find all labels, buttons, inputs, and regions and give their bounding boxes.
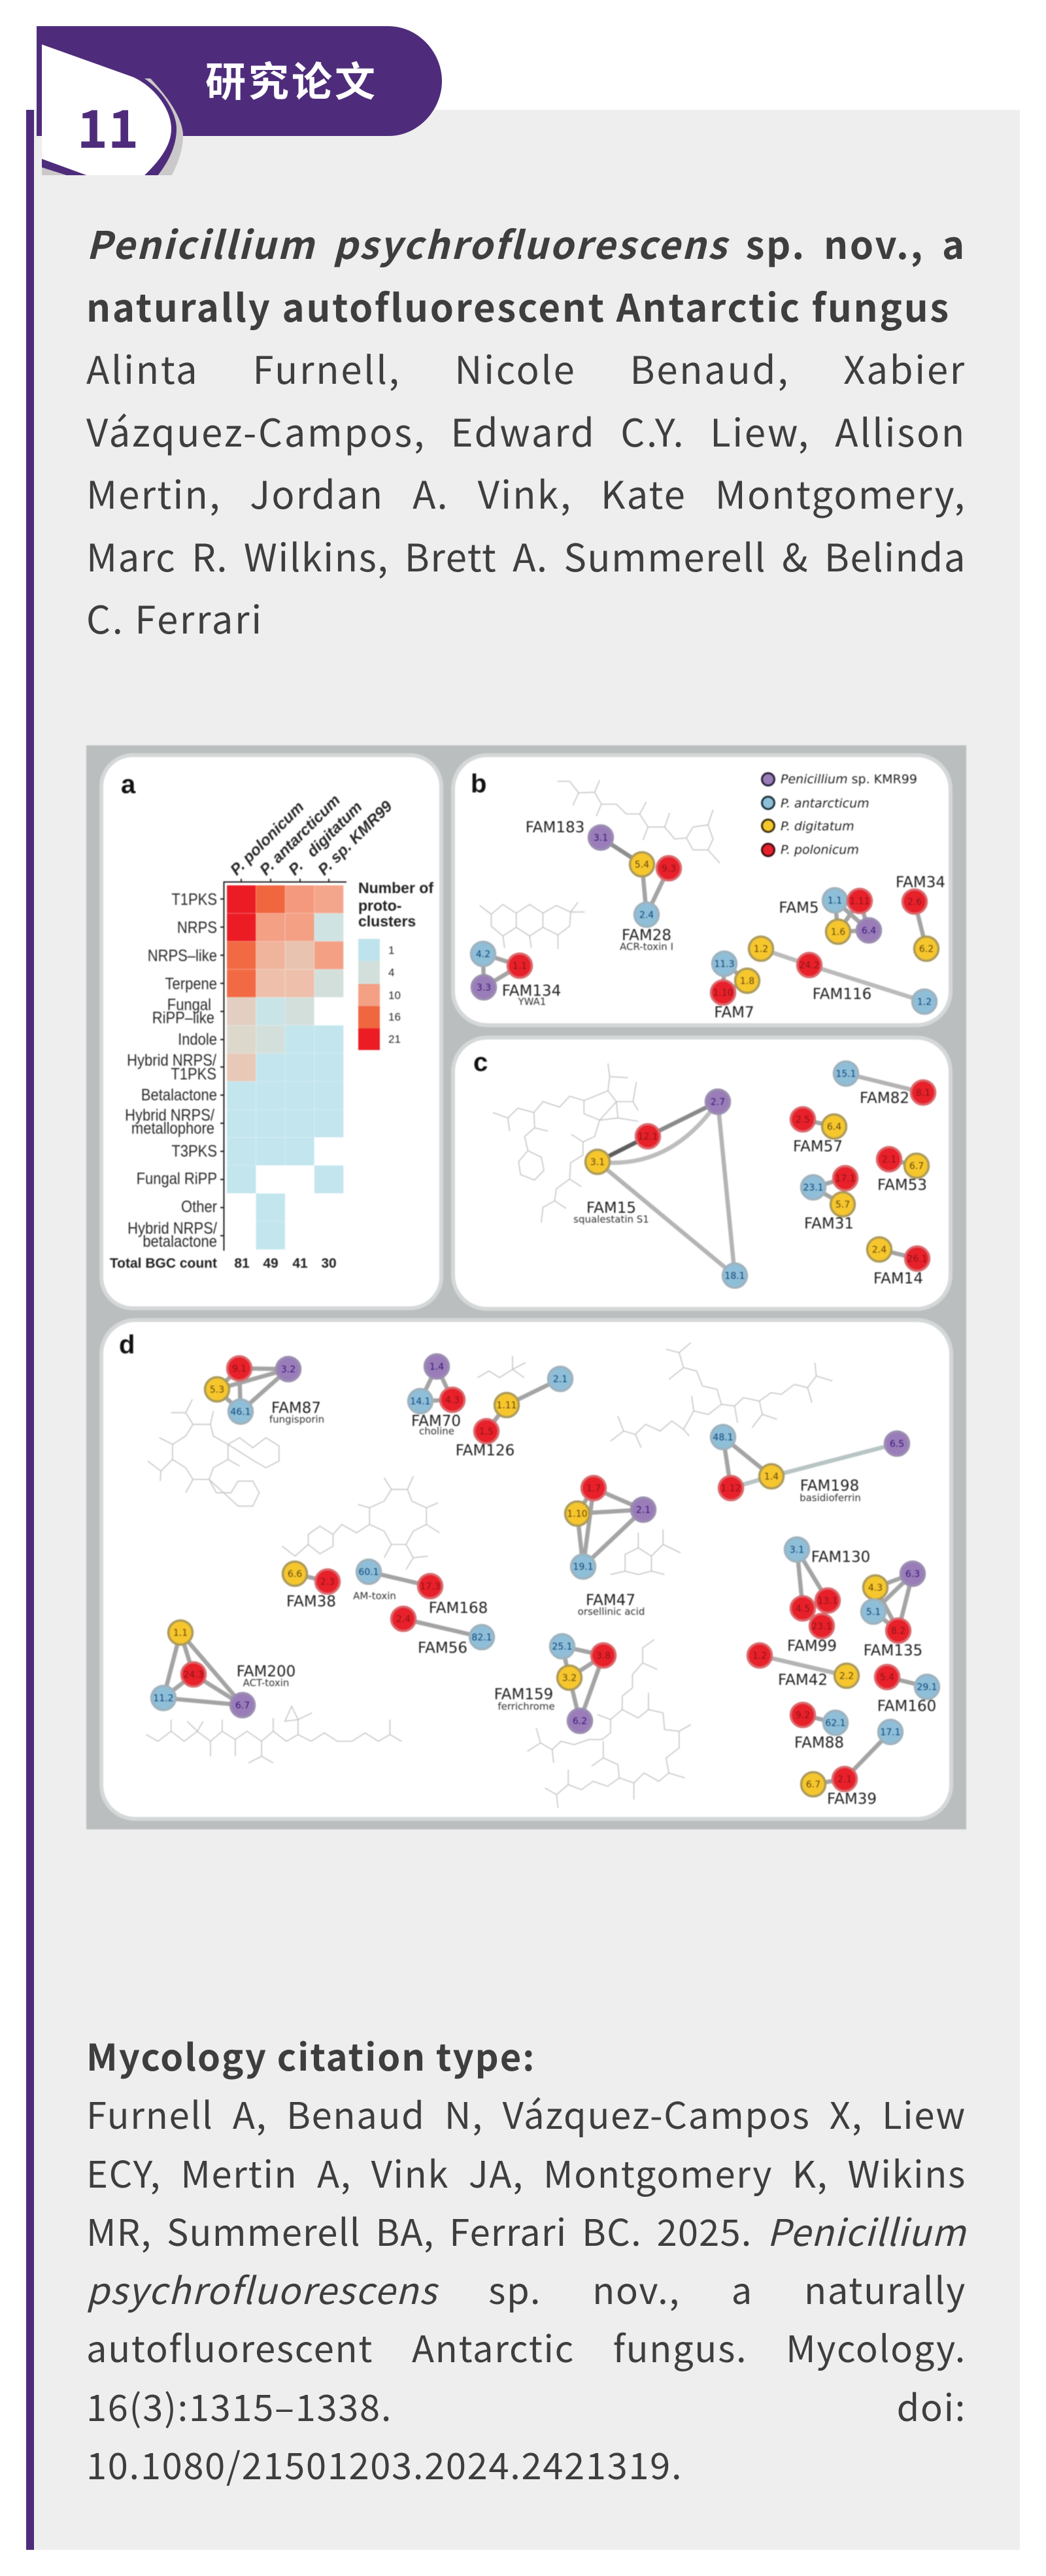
network: FAM135: FAM135 xyxy=(864,1642,922,1659)
network: FAM15 xyxy=(573,1089,747,1288)
network: FAM168: 17.3 xyxy=(420,1582,441,1592)
network: FAM130: 3.1 xyxy=(790,1545,804,1555)
network: FAM31: 23.1 xyxy=(803,1183,824,1193)
network: FAM57: FAM57 xyxy=(793,1138,843,1155)
totals row: 41 xyxy=(292,1256,308,1271)
network: FAM39 xyxy=(801,1720,902,1808)
row labels: T1PKS xyxy=(171,1066,216,1083)
network: FAM38: 6.6 xyxy=(288,1569,302,1580)
network: FAM31: 5.7 xyxy=(835,1200,850,1210)
network: FAM5: 1.1 xyxy=(828,896,842,906)
totals row: 30 xyxy=(321,1256,337,1271)
structure: fungisporin xyxy=(148,1399,279,1506)
network: FAM168 xyxy=(353,1560,488,1617)
network: FAM38: 2.3 xyxy=(320,1577,335,1587)
network: FAM126 xyxy=(456,1366,573,1459)
network: FAM70 xyxy=(408,1355,464,1437)
heatmap legend: 10 xyxy=(388,989,401,1002)
network: FAM99: FAM99 xyxy=(787,1638,837,1655)
structure: ACT-toxin xyxy=(146,1706,401,1763)
article title and authors: Mertin, Jordan A. Vink, Kate Montgomery, xyxy=(86,465,966,520)
network: FAM88: FAM88 xyxy=(794,1735,844,1752)
figure: four panels of gene cluster data xyxy=(86,745,966,1829)
row labels: T1PKS xyxy=(171,891,217,909)
network: FAM183 xyxy=(526,819,642,864)
network: FAM70: FAM70 xyxy=(411,1413,461,1430)
network: FAM47: 1.7 xyxy=(586,1483,601,1494)
network: FAM31: FAM31 xyxy=(804,1215,854,1232)
network: FAM53 xyxy=(877,1147,928,1194)
heatmap legend xyxy=(358,879,433,1050)
network: FAM57: 2.5 xyxy=(796,1115,810,1125)
row labels: betalactone xyxy=(143,1233,217,1251)
network: FAM200: 11.2 xyxy=(153,1693,174,1704)
article title and authors: naturally autofluorescent Antarctic fungus xyxy=(86,277,951,332)
network: FAM47 xyxy=(565,1476,655,1618)
network: FAM39: 2.1 xyxy=(837,1774,852,1785)
network: FAM15: 3.1 xyxy=(590,1157,605,1168)
network: FAM15: 12.1 xyxy=(637,1132,658,1142)
network: FAM116: 1.2 xyxy=(754,944,768,955)
heatmap legend: 16 xyxy=(388,1011,401,1023)
network: FAM135: 8.2 xyxy=(891,1626,905,1636)
network: FAM31: 17.1 xyxy=(835,1174,856,1184)
heatmap legend: clusters xyxy=(358,913,416,930)
network: FAM28 xyxy=(620,853,681,953)
network: FAM135: 6.3 xyxy=(905,1569,920,1580)
network: FAM34: 6.2 xyxy=(919,944,934,955)
network: FAM135 xyxy=(862,1561,924,1659)
network: FAM31 xyxy=(801,1166,858,1232)
network: FAM168: AM-toxin xyxy=(353,1590,396,1602)
network: FAM14: FAM14 xyxy=(873,1270,923,1287)
row labels: Terpene xyxy=(165,975,217,993)
network: FAM15: 2.7 xyxy=(711,1097,725,1108)
network: FAM168: FAM168 xyxy=(429,1600,488,1617)
citation block: Furnell A, Benaud N, Vázquez-Campos X, Liew xyxy=(86,2087,966,2140)
network: FAM134 xyxy=(471,941,561,1008)
network: FAM159: ferrichrome xyxy=(498,1701,555,1712)
network: FAM198: basidioferrin xyxy=(800,1492,861,1504)
banner title: 研究论文 xyxy=(205,60,378,105)
network: FAM56: FAM56 xyxy=(418,1640,467,1657)
network: FAM39: 17.1 xyxy=(880,1727,901,1738)
panel d: further families xyxy=(101,1320,951,1819)
citation block: MR, Summerell BA, Ferrari BC. 2025. Penicillium xyxy=(86,2204,966,2257)
network: FAM134: YWA1 xyxy=(518,996,546,1008)
network: FAM34: FAM34 xyxy=(896,874,945,891)
network: FAM116: FAM116 xyxy=(813,986,871,1003)
badge pentagon xyxy=(42,44,183,177)
network: FAM14: 2.4 xyxy=(872,1245,886,1255)
network: FAM159: 6.2 xyxy=(573,1716,587,1727)
network: FAM5 xyxy=(779,888,881,944)
network: FAM160: FAM160 xyxy=(877,1698,936,1715)
network: FAM159: 25.1 xyxy=(552,1642,573,1652)
totals row: Total BGC count xyxy=(110,1256,217,1271)
network: FAM134: FAM134 xyxy=(502,983,561,1000)
species legend: P. polonicum xyxy=(781,843,859,857)
network: FAM39: 6.7 xyxy=(806,1780,820,1790)
panel b: secondary metabolite families with known toxins: b xyxy=(471,770,486,798)
structure: ferrichrome xyxy=(528,1640,691,1808)
network: FAM200 xyxy=(152,1620,295,1717)
network: FAM159: 3.8 xyxy=(596,1651,611,1661)
structure: YWA1 xyxy=(480,902,584,949)
network: FAM130: FAM130 xyxy=(811,1549,870,1566)
network: FAM82: 8.1 xyxy=(916,1088,930,1098)
network: FAM47: 2.1 xyxy=(636,1505,650,1516)
network: FAM82: FAM82 xyxy=(860,1090,909,1107)
network: FAM47: 1.10 xyxy=(567,1509,588,1519)
network: FAM200: ACT-toxin xyxy=(243,1677,289,1689)
network: FAM130 xyxy=(785,1538,870,1608)
network: FAM15: squalestatin S1 xyxy=(573,1213,649,1225)
network: FAM88: 9.2 xyxy=(796,1710,810,1721)
network: FAM56: 82.1 xyxy=(471,1633,492,1643)
network: FAM39: FAM39 xyxy=(827,1791,877,1808)
article title and authors: Penicillium psychrofluorescens sp. nov., a xyxy=(86,215,966,270)
network: FAM200: 24.3 xyxy=(183,1670,204,1680)
network: FAM7: FAM7 xyxy=(714,1004,754,1021)
network: FAM82: 15.1 xyxy=(835,1069,856,1079)
row labels: Other xyxy=(181,1198,217,1216)
network: FAM160: 5.4 xyxy=(880,1672,894,1683)
network: FAM134: 4.2 xyxy=(476,949,490,960)
network: FAM56 xyxy=(391,1607,494,1657)
network: FAM56: 2.4 xyxy=(396,1614,411,1625)
structure: AM-toxin xyxy=(282,1476,439,1570)
network: FAM99 xyxy=(787,1589,839,1655)
citation block: psychrofluorescens sp. nov., a naturally xyxy=(86,2262,966,2315)
totals row: 81 xyxy=(234,1256,250,1271)
network: FAM183: 3.1 xyxy=(594,833,608,843)
banner shape xyxy=(37,26,442,136)
network: FAM70: 14.1 xyxy=(410,1397,431,1407)
network: FAM47: FAM47 xyxy=(586,1592,635,1609)
network: FAM87: 9.1 xyxy=(232,1364,246,1374)
species legend: Penicillium sp. KMR99 xyxy=(781,772,917,787)
species legend: P. digitatum xyxy=(781,819,854,834)
network: FAM34: 2.6 xyxy=(907,897,922,907)
network: FAM38: FAM38 xyxy=(286,1593,336,1610)
citation block: 16(3):1315–1338. doi: xyxy=(86,2379,966,2432)
heatmap legend: 4 xyxy=(388,966,394,979)
heatmap legend: 21 xyxy=(388,1033,401,1045)
network: FAM87 xyxy=(205,1356,324,1425)
panel a: heatmap: a xyxy=(121,770,136,799)
citation block: Mycology citation type: xyxy=(86,2029,535,2082)
network: FAM126: FAM126 xyxy=(456,1442,515,1459)
network: FAM7: 11.3 xyxy=(714,959,735,970)
network: FAM28: 2.4 xyxy=(639,910,654,921)
panel a: heatmap xyxy=(101,755,441,1308)
network: FAM200: 1.1 xyxy=(173,1628,188,1638)
structure: orsellinic acid xyxy=(611,1529,681,1574)
row labels xyxy=(125,891,217,1251)
header banner with number badge xyxy=(37,26,442,175)
column labels: P. digitatum xyxy=(285,798,366,879)
network: FAM7: 1.8 xyxy=(740,976,754,987)
network: FAM14 xyxy=(867,1237,930,1287)
structure: basidioferrin xyxy=(611,1343,832,1448)
heatmap legend: 1 xyxy=(388,944,394,957)
network: FAM183: FAM183 xyxy=(526,819,584,836)
network: FAM57: 6.4 xyxy=(827,1122,841,1132)
row labels: Indole xyxy=(178,1031,217,1049)
row labels: RiPP–like xyxy=(152,1009,214,1027)
network: FAM135: 4.3 xyxy=(868,1583,883,1593)
network: FAM15: 18.1 xyxy=(724,1271,745,1281)
network: FAM87: 5.3 xyxy=(210,1385,224,1395)
badge number: 11 xyxy=(77,88,139,163)
structure: ACR-toxin I xyxy=(557,780,720,863)
column labels: P. sp. KMR99 xyxy=(314,797,396,879)
article title and authors: Marc R. Wilkins, Brett A. Summerell & Belinda xyxy=(86,527,966,582)
column labels xyxy=(227,791,396,879)
network: FAM116: 1.2 xyxy=(917,997,932,1008)
row labels: metallophore xyxy=(131,1120,214,1138)
row labels: Fungal RiPP xyxy=(137,1170,217,1188)
network: FAM57 xyxy=(791,1108,846,1155)
network: FAM42: 1.2 xyxy=(752,1651,767,1661)
citation block: ECY, Mertin A, Vink JA, Montgomery K, Wikins xyxy=(86,2146,966,2199)
network: FAM5: FAM5 xyxy=(779,900,819,917)
panel c: squalestatin family and others xyxy=(453,1038,951,1309)
row labels: NRPS–like xyxy=(148,947,217,965)
network: FAM5: 1.11 xyxy=(849,896,870,907)
network: FAM42 xyxy=(748,1644,859,1689)
structure: choline xyxy=(477,1356,526,1378)
row labels: T3PKS xyxy=(171,1143,217,1161)
network: FAM7 xyxy=(711,952,760,1021)
column labels: P. polonicum xyxy=(227,798,308,879)
totals row: 49 xyxy=(263,1256,278,1271)
heatmap legend: Number of xyxy=(358,879,433,896)
network: FAM99: 13.1 xyxy=(817,1596,838,1606)
network: FAM28: FAM28 xyxy=(622,927,671,944)
network: FAM7: 1.10 xyxy=(713,988,734,998)
network: FAM34 xyxy=(896,874,945,961)
network: FAM82 xyxy=(834,1062,935,1107)
panel c: squalestatin family and others: c xyxy=(473,1048,488,1077)
article title and authors: Vázquez-Campos, Edward C.Y. Liew, Allison xyxy=(86,403,966,458)
network: FAM28: ACR-toxin I xyxy=(620,941,673,953)
network: FAM126: 1.5 xyxy=(479,1427,494,1437)
network: FAM134: 1.1 xyxy=(513,961,527,972)
network: FAM116 xyxy=(749,936,936,1013)
panel d: further families: d xyxy=(119,1330,135,1359)
network: FAM88 xyxy=(791,1703,847,1752)
row labels: Hybrid NRPS/ xyxy=(125,1107,214,1125)
article title and authors: C. Ferrari xyxy=(86,590,263,645)
network: FAM42: 2.2 xyxy=(839,1671,854,1682)
network: FAM116: 24.2 xyxy=(799,960,820,971)
network: FAM70: 1.4 xyxy=(430,1362,444,1372)
network: FAM53: FAM53 xyxy=(877,1177,927,1194)
heatmap legend: proto- xyxy=(358,897,401,914)
network: FAM99: 4.5 xyxy=(796,1604,810,1614)
network: FAM38 xyxy=(282,1561,340,1610)
row labels: Hybrid NRPS/ xyxy=(127,1220,217,1238)
column labels: P. antarcticum xyxy=(256,791,344,879)
structures: right half xyxy=(528,1343,832,1808)
network: FAM126: 2.1 xyxy=(553,1374,567,1385)
network: FAM159: FAM159 xyxy=(494,1686,553,1703)
row labels: Betalactone xyxy=(141,1087,217,1104)
network: FAM200: FAM200 xyxy=(237,1663,295,1680)
species legend: P. antarcticum xyxy=(781,796,869,811)
network: FAM168: 60.1 xyxy=(358,1567,379,1578)
citation block: 10.1080/21501203.2024.2421319. xyxy=(86,2437,683,2490)
species legend xyxy=(762,772,917,857)
network: FAM28: 5.4 xyxy=(635,860,649,870)
network: FAM135: 5.1 xyxy=(866,1607,881,1618)
network: FAM47: orsellinic acid xyxy=(578,1606,645,1618)
network: FAM87: fungisporin xyxy=(269,1414,324,1425)
purple sidebar xyxy=(26,110,34,2550)
network: FAM159 xyxy=(494,1635,616,1733)
network: FAM99: 23.1 xyxy=(811,1621,832,1632)
totals row xyxy=(110,1256,337,1271)
structures: left half xyxy=(146,1356,526,1763)
row labels: Hybrid NRPS/ xyxy=(127,1052,216,1070)
network: FAM126: 1.11 xyxy=(496,1400,517,1411)
panel b: secondary metabolite families with known toxins xyxy=(453,755,951,1025)
network: FAM87: 46.1 xyxy=(230,1407,251,1417)
network: FAM53: 2.1 xyxy=(882,1155,896,1165)
network: FAM198: 6.5 xyxy=(890,1439,904,1449)
network: FAM198: 48.1 xyxy=(713,1432,734,1443)
network: FAM5: 1.6 xyxy=(831,927,845,938)
network: FAM200: 6.7 xyxy=(235,1701,250,1711)
row labels: Fungal xyxy=(167,996,211,1014)
network: FAM87: FAM87 xyxy=(271,1400,321,1417)
citation block xyxy=(86,2029,966,2490)
network: FAM14: 26.1 xyxy=(907,1254,928,1264)
network: FAM159: 3.2 xyxy=(562,1673,577,1684)
article title and authors: Alinta Furnell, Nicole Benaud, Xabier xyxy=(86,340,966,395)
heatmap cells xyxy=(227,885,343,1249)
network: FAM134: 3.3 xyxy=(477,983,491,993)
citation block: autofluorescent Antarctic fungus. Mycology. xyxy=(86,2320,966,2373)
network: FAM70: 4.3 xyxy=(445,1395,460,1406)
network: FAM198: 1.4 xyxy=(764,1472,779,1482)
network: FAM47: 19.1 xyxy=(573,1562,594,1572)
network: FAM70: choline xyxy=(419,1425,454,1437)
network: FAM28: 9.3 xyxy=(662,864,676,874)
network: FAM42: FAM42 xyxy=(778,1672,828,1689)
row labels: NRPS xyxy=(177,919,217,937)
network: FAM198: 1.12 xyxy=(720,1483,741,1494)
network: FAM198: FAM198 xyxy=(800,1478,859,1495)
network: FAM15: FAM15 xyxy=(586,1200,636,1217)
network: FAM160 xyxy=(875,1665,939,1715)
network: FAM198 xyxy=(711,1425,909,1504)
network: FAM5: 6.4 xyxy=(862,926,876,936)
network: FAM160: 29.1 xyxy=(917,1682,937,1693)
network: FAM87: 3.2 xyxy=(281,1364,295,1375)
network: FAM88: 62.1 xyxy=(825,1718,846,1729)
network: FAM53: 6.7 xyxy=(909,1161,924,1172)
article title and authors xyxy=(86,215,966,645)
structure: squalestatin S1 xyxy=(493,1064,638,1223)
